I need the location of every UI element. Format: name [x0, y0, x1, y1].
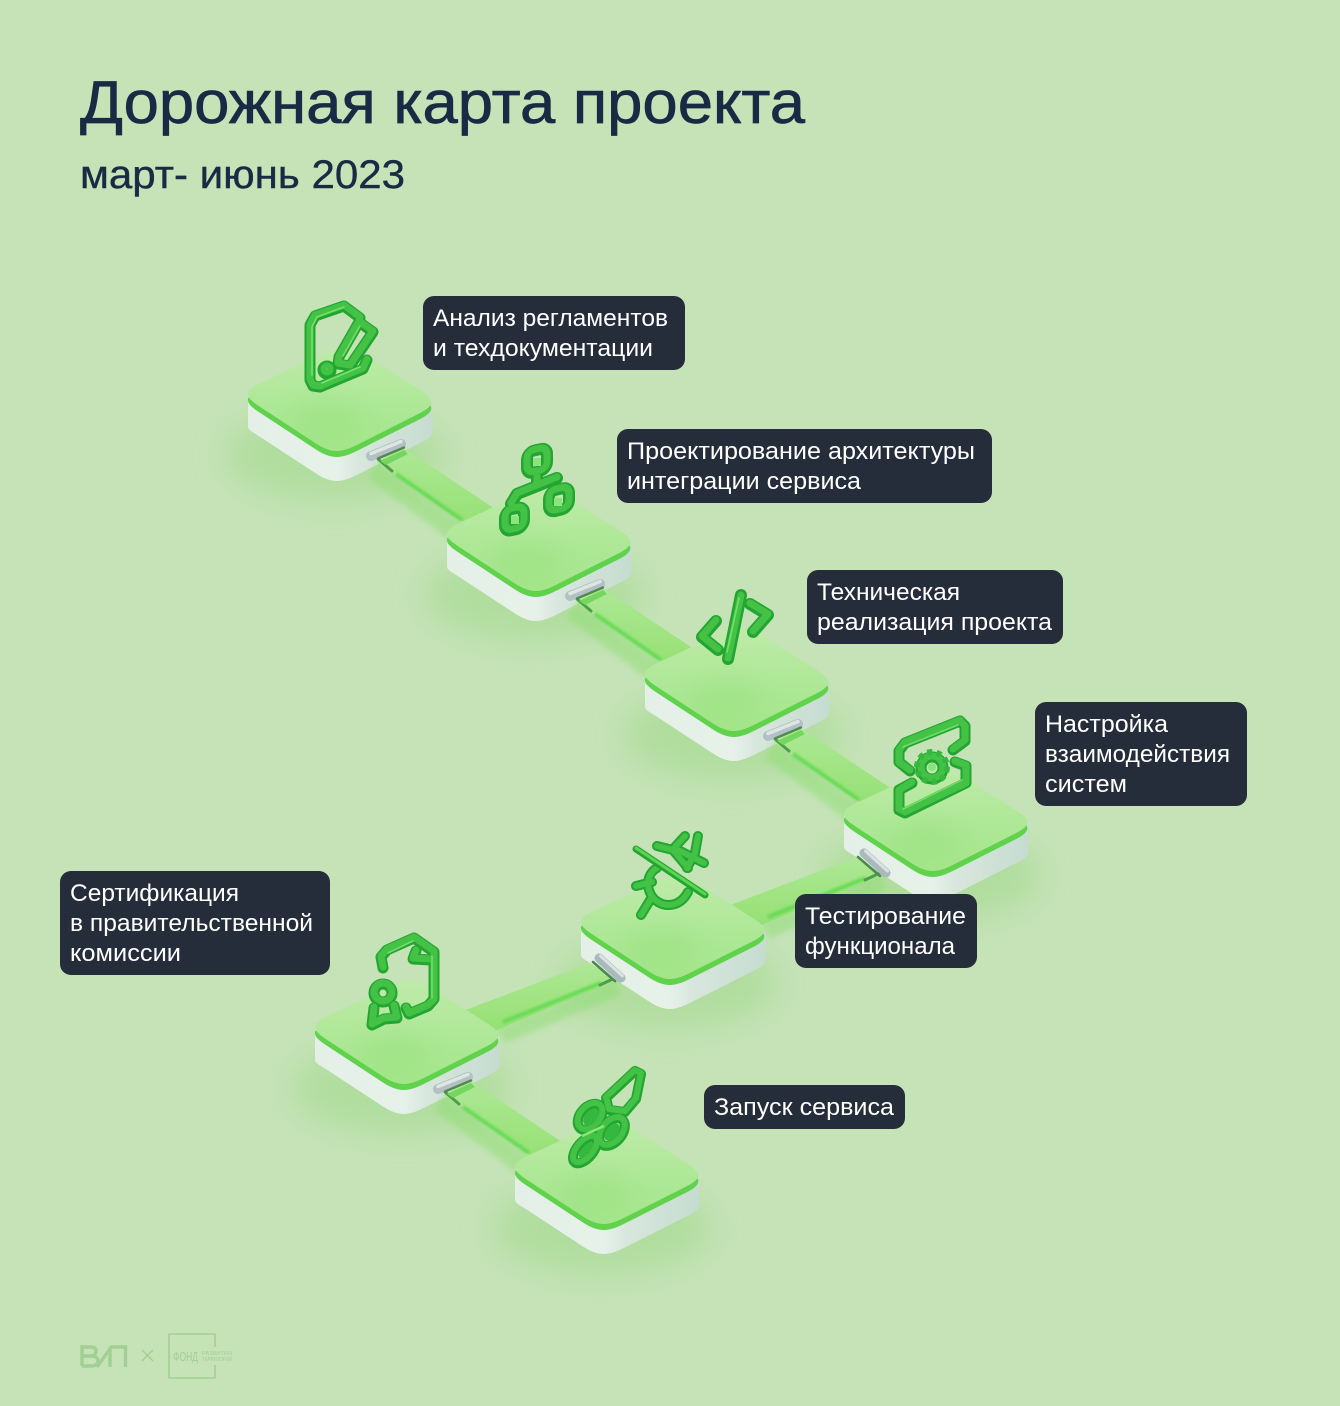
platform 1 with connector to platform 2 [248, 348, 510, 540]
logo: fund: РАЗВИТИЯ [202, 1351, 232, 1357]
label: certification: Сертификация [70, 880, 239, 907]
label: interaction setup: систем [1045, 771, 1127, 798]
logo: fund: ФОНД [173, 1349, 198, 1364]
soft shadows beneath the platforms [225, 409, 1041, 1274]
label: implementation: реализация проекта [817, 609, 1053, 636]
label: launch: Запуск сервиса [714, 1094, 895, 1121]
label: implementation: Техническая [817, 579, 960, 606]
logo: VP [82, 1346, 126, 1367]
label: certification: комиссии [70, 940, 181, 967]
label: testing [795, 894, 977, 968]
platform 7 [515, 1121, 700, 1254]
connector from platform 4 to platform 5 [725, 851, 888, 938]
connector from platform 5 to platform 6 [460, 956, 622, 1043]
platform 4 [844, 768, 1028, 901]
label: launch [704, 1085, 905, 1129]
icon: linked systems with gear [899, 720, 966, 813]
platform 5 [581, 876, 766, 1009]
label: analysis: Анализ регламентов [433, 305, 668, 332]
logo: fund: ТЕРРИТОРИЙ [202, 1355, 232, 1363]
label: architecture [617, 429, 992, 503]
label: analysis [423, 296, 685, 370]
icon: document with pen [310, 305, 373, 387]
icon: code brackets [702, 595, 768, 659]
platform 3 with connector to platform 4 [645, 628, 907, 820]
label: testing: Тестирование [805, 903, 966, 930]
label: implementation [807, 570, 1063, 644]
label: analysis: и техдокументации [433, 335, 653, 362]
label: certification [60, 871, 330, 975]
label: testing: функционала [805, 933, 956, 960]
title: Дорожная карта проекта [80, 69, 806, 136]
logo separator: times [142, 1350, 153, 1361]
platform 6 with connector to platform 7 [315, 981, 577, 1173]
icon: crossed-out currency symbols [636, 836, 705, 915]
label: architecture: интеграции сервиса [627, 468, 862, 495]
platform 2 with connector to platform 3 [447, 488, 709, 680]
logo: fund [169, 1334, 232, 1378]
label: architecture: Проектирование архитектуры [627, 438, 975, 465]
label: interaction setup: взаимодействия [1045, 741, 1230, 768]
icon: rocket [569, 1070, 641, 1167]
connector port on platform 5 [593, 956, 622, 981]
icon: hierarchy nodes [505, 447, 569, 532]
subtitle: март- июнь 2023 [80, 153, 405, 197]
label: interaction setup [1035, 702, 1247, 806]
label: certification: в правительственной [70, 910, 313, 937]
label: interaction setup: Настройка [1045, 711, 1169, 738]
icon: certificate with rosette [372, 937, 434, 1025]
